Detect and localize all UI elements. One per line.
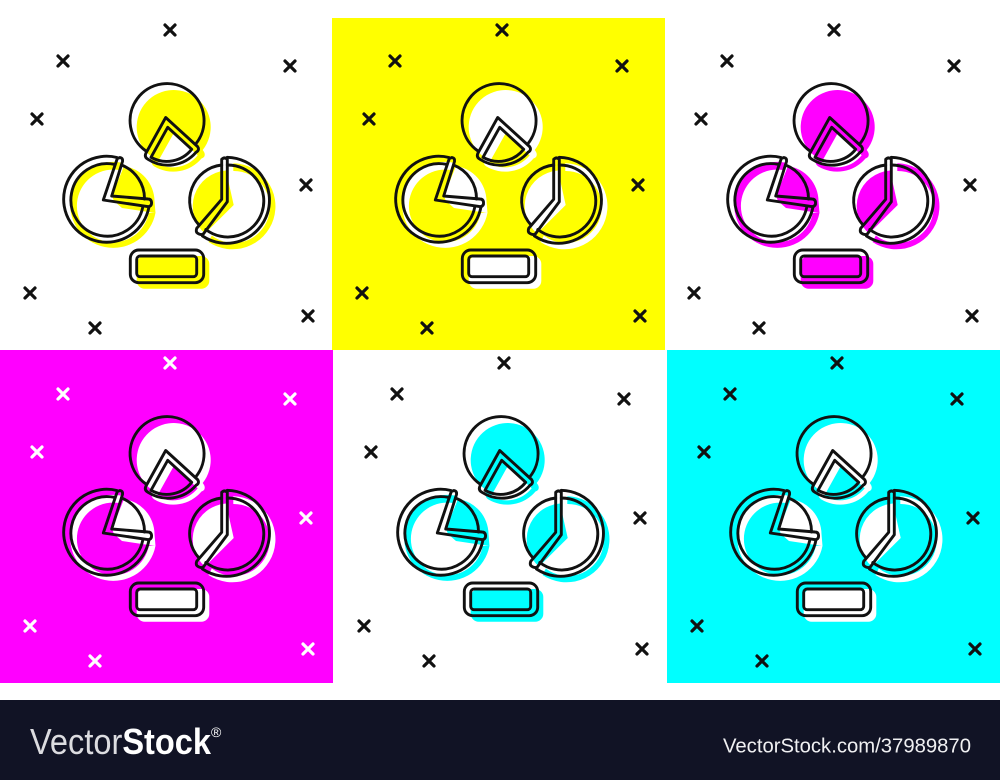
icon: pie charts, white accent on magenta — [64, 417, 275, 622]
icon: pie charts, white accent on cyan — [731, 417, 942, 622]
scattered cross marks, panel 1 — [25, 25, 313, 333]
icon: pie charts, magenta accent — [728, 84, 939, 289]
panel: white with yellow icon — [0, 18, 332, 350]
VectorStock logo text: VectorStock — [30, 721, 212, 762]
panel: magenta with white icon — [0, 350, 333, 683]
registered mark: ® — [211, 724, 222, 740]
panel: yellow with white icon — [332, 18, 665, 350]
icon: pie charts, white accent — [396, 84, 607, 289]
scattered cross marks, panel 3 — [689, 25, 977, 333]
image id text: VectorStock.com/37989870 — [723, 736, 971, 758]
footer bar — [0, 700, 1000, 780]
panel: white with cyan icon — [333, 350, 667, 683]
scattered cross marks, panel 2 — [357, 25, 645, 333]
scattered cross marks, panel 5 — [359, 358, 647, 666]
icon: pie charts, cyan accent — [398, 417, 609, 622]
panel: cyan with white icon — [667, 350, 1000, 683]
scattered cross marks, panel 6 — [692, 358, 980, 666]
icon: pie charts, yellow accent — [64, 84, 275, 289]
panel: white with magenta icon — [665, 18, 1000, 350]
scattered cross marks, panel 4 — [25, 358, 313, 666]
